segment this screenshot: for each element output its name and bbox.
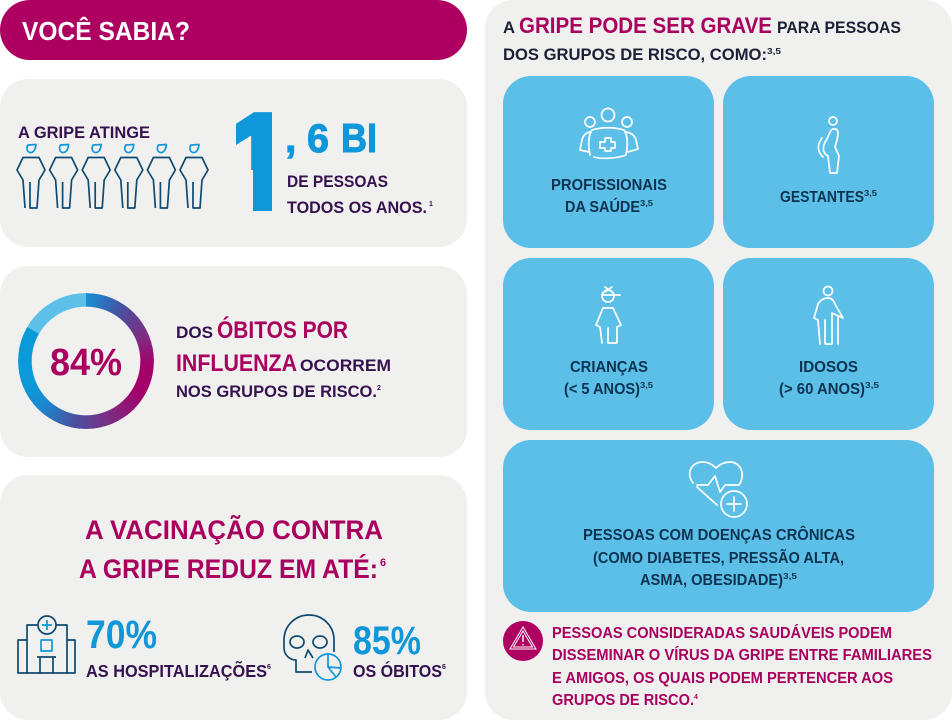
donut value: 84% [50,342,122,384]
heading: vaccination reduces [79,514,386,584]
panel: vaccination [0,475,467,720]
donut chart 84% [18,293,154,429]
heading: vaccination reduces: 6 [380,557,386,569]
icon: hospital [18,616,75,673]
heading: risk groups: GRIPE PODE SER GRAVE [519,13,772,38]
text: deaths statement [176,316,391,401]
heading: vaccination reduces: A VACINAÇÃO CONTRA [85,514,383,545]
big number 6 BI: 6 [307,117,329,161]
heading: risk groups: A [503,18,515,37]
card label: ASMA, OBESIDADE) [640,572,783,589]
warning text: DISSEMINAR O VÍRUS DA GRIPE ENTRE FAMILIARES [552,645,932,664]
text: de pessoas todos os anos: 1 [429,201,433,208]
warning text: PESSOAS CONSIDERADAS SAUDÁVEIS PODEM [552,623,892,642]
icon: heart with plus [690,462,747,517]
card: pregnant women [723,76,934,248]
big number 6 BI: BI [341,115,377,161]
heading: risk groups: PARA PESSOAS [777,18,901,37]
text: deaths statement: INFLUENZA [176,350,297,377]
icon: elderly person [814,286,843,344]
warning text: 4 [694,694,698,701]
card label: 3,5 [640,199,654,208]
card label [779,359,880,398]
icon: six people [17,144,208,208]
panel: 1.6 billion people [0,79,467,247]
stat: 85%: 85% [353,619,421,663]
heading: risk groups: DOS GRUPOS DE RISCO, COMO: [503,45,767,64]
label: as hospitalizações: AS HOSPITALIZAÇÕES [86,660,267,681]
card: chronic diseases [503,440,934,612]
card label: IDOSOS [799,359,858,376]
icon: pregnant woman [818,117,839,173]
icon: skull with pie [284,615,341,680]
icon: child [596,287,621,343]
warning text: GRUPOS DE RISCO. [552,692,694,709]
big number 6 BI: , [285,115,296,161]
card label [583,525,855,589]
card label [551,177,667,216]
card label: GESTANTES [780,189,864,206]
card label: 3,5 [640,381,654,390]
text: deaths statement: NOS GRUPOS DE RISCO. [176,382,377,401]
header banner [0,0,467,60]
label: os óbitos: 6 [442,664,446,671]
heading: risk groups [503,13,901,64]
text: de pessoas todos os anos [287,172,433,217]
label: as hospitalizações: 6 [267,664,271,671]
card label: PROFISSIONAIS [551,177,667,194]
text: deaths statement: 2 [377,385,381,392]
panel: risk groups [485,0,952,720]
card: elderly [723,258,934,430]
warning text [552,623,932,709]
label: os óbitos: OS ÓBITOS [353,660,442,681]
text: deaths statement: ÓBITOS POR [217,316,348,344]
card label: 3,5 [783,572,798,581]
card label: 3,5 [864,189,878,198]
heading: vaccination reduces: A GRIPE REDUZ EM ATÉ: [79,553,378,584]
text: de pessoas todos os anos: DE PESSOAS [287,172,388,191]
card label [564,359,654,398]
text: de pessoas todos os anos: TODOS OS ANOS. [287,198,427,217]
card label: DA SAÚDE [565,197,640,216]
card label: (< 5 ANOS) [564,381,640,398]
text: deaths statement: DOS [176,323,213,342]
card label: (COMO DIABETES, PRESSÃO ALTA, [593,547,844,567]
card label: 3,5 [865,381,880,390]
header title: VOCÊ SABIA? [22,16,190,46]
icon: warning [503,621,543,661]
warning text: E AMIGOS, OS QUAIS PODEM PERTENCER AOS [552,670,893,687]
label: a gripe atinge: A GRIPE ATINGE [18,123,150,142]
heading: risk groups: 3,5 [767,47,782,56]
stat: 70%: 70% [86,613,157,657]
text: deaths statement: OCORREM [300,356,391,375]
panel: 84% deaths [0,266,467,457]
big number 1: 1 [221,84,299,241]
card: children [503,258,714,430]
card label: (> 60 ANOS) [779,381,865,398]
icon: health workers [580,108,638,158]
card label: PESSOAS COM DOENÇAS CRÔNICAS [583,525,855,544]
big number 6 BI [285,115,377,161]
card: health professionals [503,76,714,248]
card label: CRIANÇAS [570,359,648,376]
